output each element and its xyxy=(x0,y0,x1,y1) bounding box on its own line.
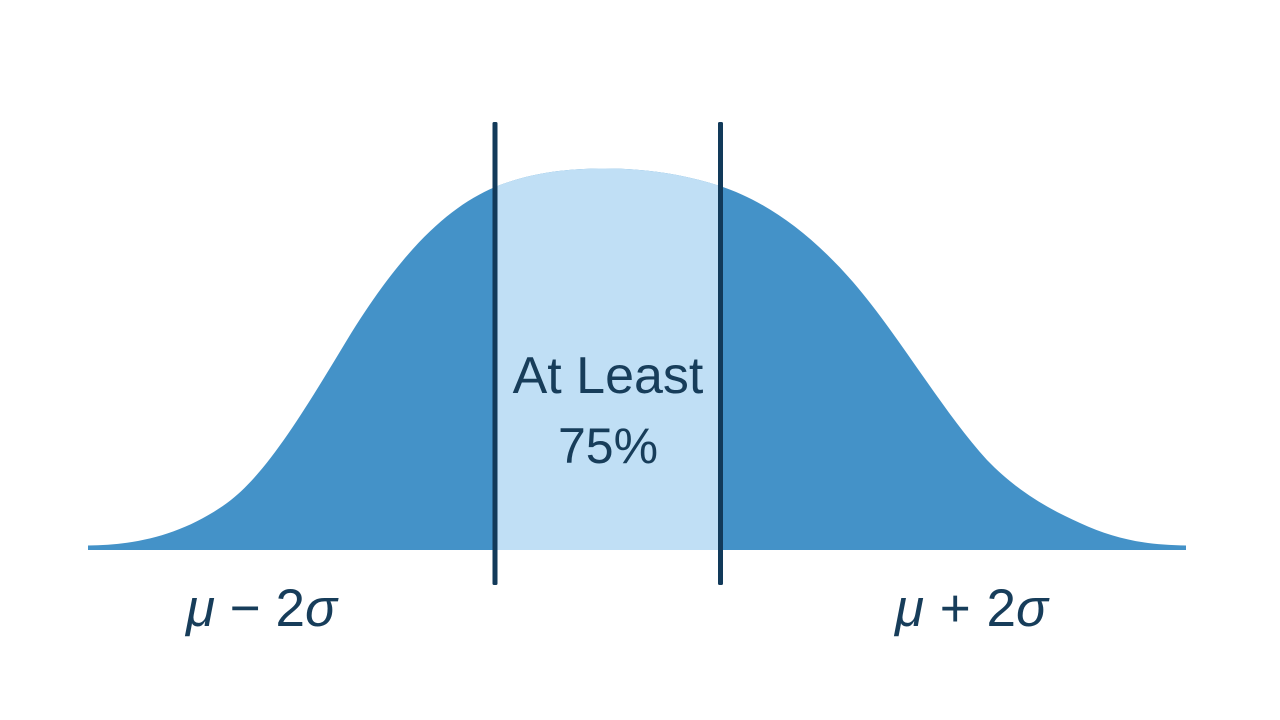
left boundary line at mu minus two sigma xyxy=(492,122,498,585)
right boundary line at mu plus two sigma xyxy=(718,122,723,585)
central label: At Least 75%: 75% xyxy=(558,418,658,474)
left axis label: mu minus two sigma: μ − 2σ xyxy=(184,579,339,638)
central label: At Least 75%: At Least xyxy=(513,347,704,405)
central label: At Least 75% xyxy=(513,347,704,474)
right axis label: mu plus two sigma: μ + 2σ xyxy=(893,579,1050,638)
central shaded region xyxy=(498,168,718,550)
chart: bell curve with two-sigma interval xyxy=(88,122,1186,636)
bell curve: outer tails xyxy=(88,168,1186,550)
